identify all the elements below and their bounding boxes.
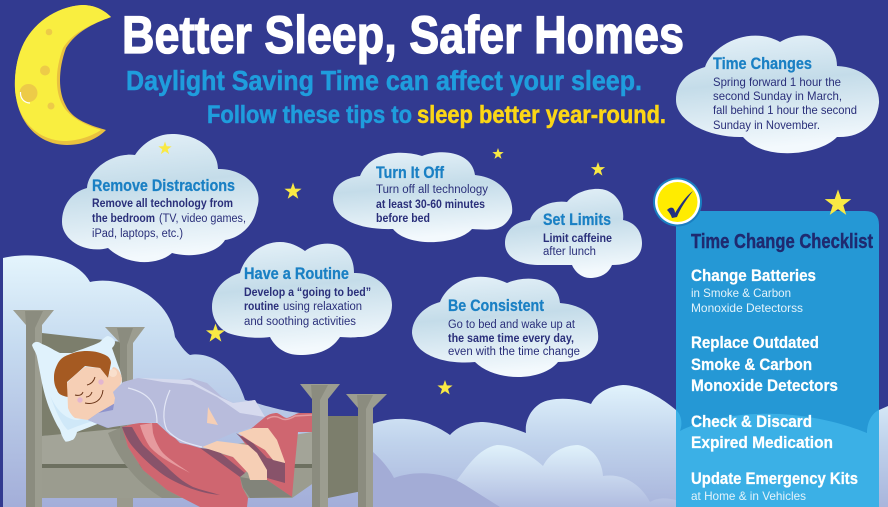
mattress [42,428,312,498]
right edge cloud [879,406,888,507]
text: remove distractions: Remove all technology from [92,198,233,210]
foot post left [300,384,340,507]
grey bed under feet [240,477,292,498]
star [206,324,225,342]
under bed leg [117,498,133,507]
foot post right [346,394,387,507]
blanket left [122,423,248,507]
leg and foot upper [238,428,285,463]
bed and sleeper illustration [13,310,387,507]
text: time changes: Sunday in November. [713,118,820,132]
subtitle line 1: Daylight Saving Time can affect your sleep. [126,65,642,96]
cheek blush [98,379,104,385]
bottom left cloud [3,255,372,507]
panel: time change checklist [676,211,879,507]
star [437,380,453,394]
text: time changes: second Sunday in March, [713,89,842,103]
moon [15,5,111,145]
head post left [13,310,54,507]
foot board panel [328,416,367,498]
icon: checkmark badge [653,178,702,226]
head post right [105,327,145,440]
text: time changes: fall behind 1 hour the second [713,103,857,117]
cloud: remove distractions [62,134,259,262]
cloud: time changes [676,36,879,153]
text: have a routine: routine [244,301,279,313]
item: check and discard: Check & Discard [691,412,812,431]
item: update emergency kits: Update Emergency Kits [691,469,858,488]
text: set limits: after lunch [543,246,596,258]
leg and foot lower [202,441,267,480]
heading: set limits: Set Limits [543,211,611,229]
subtitle highlight: sleep better year-round. [417,101,666,129]
pillow [32,336,122,442]
bottom right back cloud [372,385,676,507]
title: Better Sleep, Safer Homes [122,6,684,65]
under blanket shadow [108,427,182,498]
heading: remove distractions: Remove Distractions [92,177,235,195]
text: remove distractions: the bedroom [92,213,155,225]
nightgown [88,378,265,447]
star [492,148,504,159]
bottom right front cloud [457,445,676,507]
cloud: set limits [505,189,642,278]
ear [109,369,117,377]
pillow shade [50,395,115,430]
lower rail [42,468,312,498]
star over panel [825,190,851,215]
heading: have a routine: Have a Routine [244,265,349,283]
text: have a routine: and soothing activities [244,316,356,328]
face [67,367,122,420]
text: turn it off: Turn off all technology [376,184,488,196]
text: set limits: Limit caffeine [543,233,612,245]
text: remove distractions: iPad, laptops, etc.) [92,228,183,240]
blanket right [240,413,312,497]
text: be consistent: even with the time change [448,346,580,358]
text: turn it off: at least 30-60 minutes [376,199,485,211]
text: turn it off: before bed [376,213,430,225]
cheek blush [77,397,83,403]
text: be consistent: Go to bed and wake up at [448,319,576,331]
text: remove distractions: (TV, video games, [159,213,246,225]
heading: turn it off: Turn It Off [376,164,444,182]
text: time changes: Spring forward 1 hour the [713,75,841,89]
foot dark fold [236,433,285,483]
rail shadow line [42,464,312,468]
gown top fold [140,378,265,417]
hair [54,351,111,397]
star [284,182,302,199]
smile and closed eyes [75,377,103,403]
blanket edge highlight [267,415,312,419]
headboard panel [42,333,122,436]
subtitle line 2: Follow these tips to [207,101,412,129]
skin gap [207,407,218,425]
cloud: turn it off [333,152,512,242]
item detail: change batteries: in Smoke & Carbon [691,286,791,300]
item: check and discard: Expired Medication [691,433,833,452]
heading: time changes: Time Changes [713,55,812,73]
cloud: be consistent [412,277,598,377]
cloud: have a routine [212,242,392,355]
star [591,162,605,176]
panel lower cloud [676,410,879,507]
text: be consistent: the same time every day, [448,333,574,345]
item: replace outdated detectors: Replace Outdated [691,333,819,352]
gown sleeve [88,398,124,428]
item: replace outdated detectors: Smoke & Carbon [691,355,812,374]
item detail: kits: at Home & in Vehicles [691,489,806,503]
text: have a routine: Develop a “going to bed” [244,287,371,299]
blanket pink fold [140,423,190,473]
blanket dark fold lower [200,448,245,477]
low darker cloud [373,452,500,507]
item: change batteries: Change Batteries [691,266,816,285]
star [158,142,172,154]
gown highlight [128,388,202,447]
heading: be consistent: Be Consistent [448,297,544,315]
blanket dark fold [122,427,220,495]
text: have a routine: using relaxation [283,301,362,313]
item: replace outdated detectors: Monoxide Detectors [691,376,838,395]
item detail: change batteries: Monoxide Detectorss [691,301,803,315]
